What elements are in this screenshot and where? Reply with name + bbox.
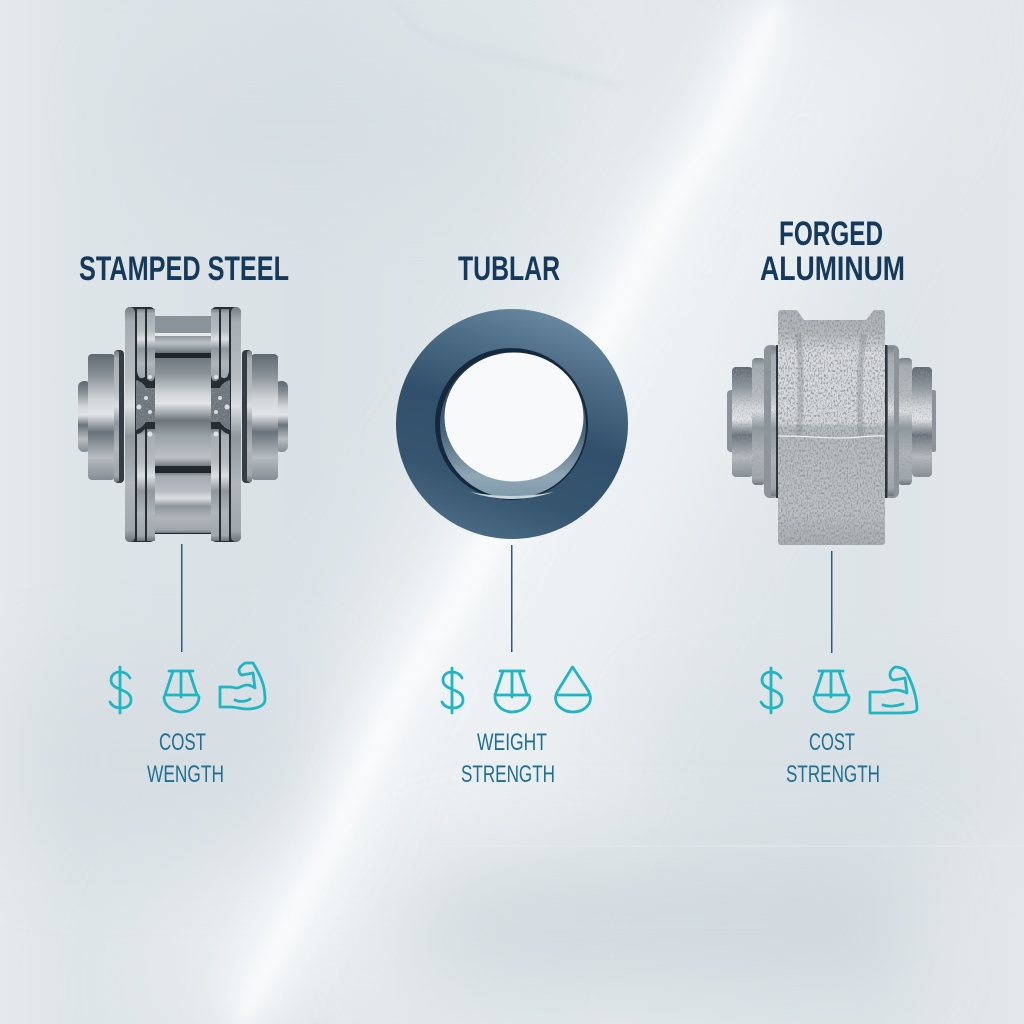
icon: water drop <box>556 667 590 712</box>
label: stamped steel: COST <box>159 729 206 756</box>
label: forged aluminum: STRENGTH <box>786 761 880 788</box>
heading: forged aluminum: FORGED <box>779 215 883 253</box>
heading: tublar: TUBLAR <box>458 250 560 288</box>
label: tublar: STRENGTH <box>461 761 555 788</box>
icon: scale <box>814 671 849 712</box>
label: tublar: WEIGHT <box>477 729 547 756</box>
heading: forged aluminum: ALUMINUM <box>760 250 905 288</box>
tublar ring <box>396 309 628 539</box>
label: forged aluminum <box>786 729 880 788</box>
icon: dollar <box>761 668 782 713</box>
left hub <box>727 345 779 498</box>
heading: stamped steel: STAMPED STEEL <box>79 250 289 288</box>
icon: scale <box>495 671 530 712</box>
connector line: forged aluminum <box>831 551 832 653</box>
connector line: stamped steel <box>181 544 182 652</box>
icon: muscle arm <box>870 667 917 713</box>
barrel and blocks <box>153 316 215 534</box>
label: stamped steel <box>147 729 224 788</box>
icon: scale <box>164 671 199 712</box>
icons: forged aluminum <box>761 667 917 713</box>
icon: muscle arm <box>220 663 265 709</box>
heading: forged aluminum <box>760 215 905 288</box>
icon: dollar <box>442 668 463 713</box>
forged aluminum bearing <box>727 310 936 545</box>
stamped steel bearing <box>78 307 288 542</box>
icons: stamped steel <box>110 663 265 713</box>
left hub and flanges <box>78 307 155 542</box>
label: tublar <box>461 729 555 788</box>
icon: dollar <box>110 667 131 713</box>
right hub <box>884 345 936 498</box>
icons: tublar <box>442 667 590 713</box>
connector line: tublar <box>511 545 512 652</box>
label: stamped steel: WENGTH <box>147 761 224 788</box>
forged body <box>778 310 885 545</box>
label: forged aluminum: COST <box>809 729 855 756</box>
right hub and flanges <box>211 307 288 542</box>
